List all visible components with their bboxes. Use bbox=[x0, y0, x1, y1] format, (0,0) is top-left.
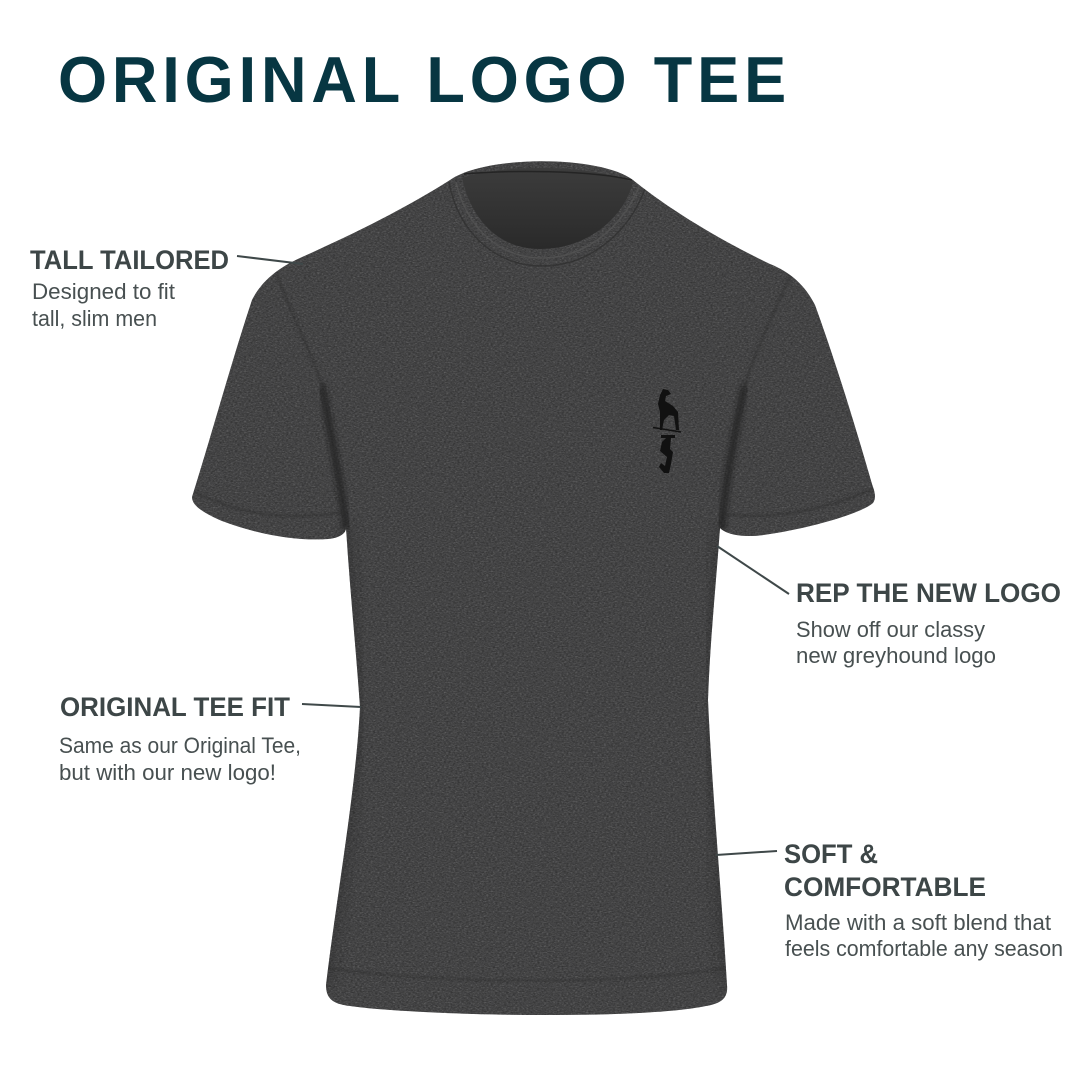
callout: rep the new logo: Show off our classy bbox=[796, 617, 985, 642]
callout: soft and comfortable bbox=[716, 839, 1063, 961]
callout: soft and comfortable: feels comfortable any season bbox=[785, 936, 1063, 961]
callout: rep the new logo bbox=[717, 546, 1061, 668]
callout: rep the new logo: REP THE NEW LOGO bbox=[796, 578, 1061, 608]
shirt body bbox=[192, 161, 875, 1015]
callout: tall tailored: tall, slim men bbox=[32, 306, 157, 331]
t-shirt bbox=[192, 161, 875, 1015]
logo: greyhound and monogram bbox=[653, 389, 681, 473]
callout: original tee fit: ORIGINAL TEE FIT bbox=[60, 692, 290, 722]
monogram bbox=[659, 435, 675, 473]
callout: rep the new logo: new greyhound logo bbox=[796, 643, 996, 668]
callout: tall tailored bbox=[30, 245, 303, 331]
shirt shading bbox=[192, 270, 875, 985]
callout: original tee fit bbox=[59, 692, 361, 785]
callout: original tee fit: but with our new logo! bbox=[59, 760, 276, 785]
callout: soft and comfortable: Made with a soft blend that bbox=[785, 910, 1051, 935]
callout: original tee fit: Same as our Original Tee, bbox=[59, 733, 301, 758]
callout: tall tailored: TALL TAILORED bbox=[30, 245, 229, 275]
callout: tall tailored: Designed to fit bbox=[32, 279, 175, 304]
collar opening bbox=[462, 168, 633, 249]
callout: soft and comfortable: COMFORTABLE bbox=[784, 872, 986, 902]
divider line bbox=[653, 428, 681, 432]
title: ORIGINAL LOGO TEE bbox=[58, 43, 791, 116]
callout: soft and comfortable: SOFT & bbox=[784, 839, 878, 869]
icon: greyhound bbox=[658, 389, 679, 430]
collar stitching bbox=[449, 172, 646, 266]
